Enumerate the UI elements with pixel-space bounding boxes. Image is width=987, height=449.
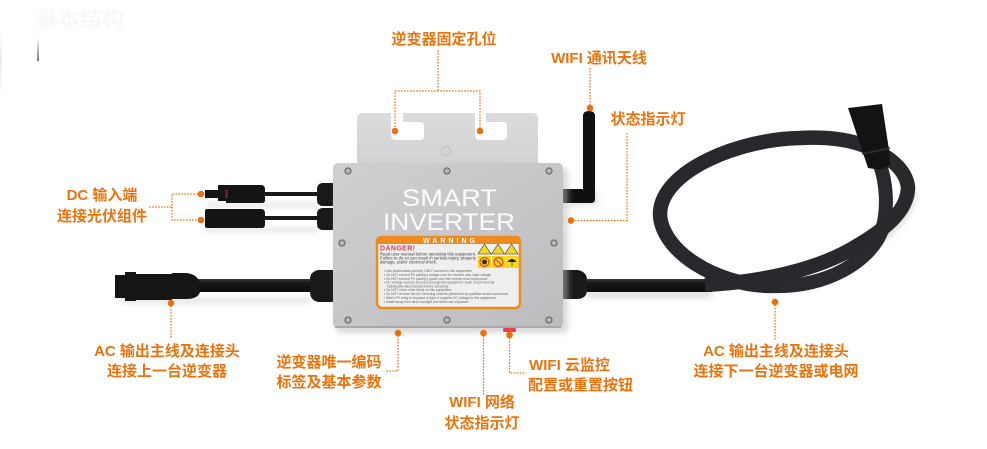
inverter mounting plate <box>357 113 538 164</box>
faint section title: 基本结构 <box>36 7 124 32</box>
cable end connector <box>848 104 890 170</box>
warning label: WARNING <box>423 238 476 245</box>
warning bullet list: • When PV array is exposed to light, it supplies DC voltage to this equipment. <box>384 296 496 300</box>
callout: serial code label: 逆变器唯一编码 <box>276 353 382 371</box>
body screws <box>339 168 557 323</box>
warning label: DANGER! <box>380 246 415 252</box>
warning bullet list: • Do NOT cover other items on this equipment. <box>384 288 452 292</box>
callout: DC input: 连接光伏组件 <box>57 207 147 225</box>
coiled AC cable with connector <box>587 104 912 298</box>
warning bullet list: • Do NOT exceed PV panel(s) power over the inverter max input power. <box>384 277 488 281</box>
callout: wifi network light: WIFI 网络 <box>449 393 515 411</box>
warning label: Failure to do so can result in serious injury, property <box>380 256 477 260</box>
warning bullet list: • Install away from direct sunlight and direct rain exposure. <box>384 300 469 304</box>
product name: INVERTER <box>383 209 515 236</box>
callout: DC input <box>57 186 204 225</box>
warning bullet list: individually disconnected before servicing. <box>387 284 449 288</box>
callout: AC output right: 连接下一台逆变器或电网 <box>693 362 859 380</box>
callout: AC output right: AC 输出主线及连接头 <box>703 342 849 360</box>
warning label: damage, and/or electrical shock. <box>380 260 437 264</box>
callout: wifi network light <box>444 330 520 432</box>
callout: status light: 状态指示灯 <box>610 110 686 128</box>
callout: AC output left: AC 输出主线及连接头 <box>94 342 240 360</box>
callout: mounting holes <box>391 30 497 134</box>
warning bullet list: • Use photovoltaic panel(s) ONLY connect to this equipment. <box>384 269 472 273</box>
warning bullet list: • DC voltage sources are pass through this equipment. Each circuit must be <box>384 281 495 285</box>
warning bullet list: • Do NOT exceed PV panel(s) voltage over the inverter max input voltage. <box>384 273 492 277</box>
product name <box>383 185 515 236</box>
callout: wifi cloud button: 配置或重置按钮 <box>528 376 633 394</box>
callout: serial code label <box>276 330 401 391</box>
product name: SMART <box>402 185 497 212</box>
callout: AC output left: 连接上一台逆变器 <box>107 362 227 380</box>
warning bullet list <box>384 269 509 304</box>
callout: DC input: DC 输入端 <box>67 186 137 204</box>
callout: AC output right <box>693 299 859 380</box>
callout: wifi antenna <box>551 49 647 111</box>
callout: wifi cloud button: WIFI 云监控 <box>529 356 610 374</box>
callout: serial code label: 标签及基本参数 <box>276 373 382 391</box>
callout: status light <box>568 110 686 224</box>
DC input cables and connectors <box>205 185 320 232</box>
red reset button <box>503 328 516 332</box>
callout: wifi cloud button <box>506 332 633 394</box>
callout: wifi network light: 状态指示灯 <box>444 414 520 432</box>
faint section title <box>0 7 124 90</box>
inverter body <box>333 163 568 333</box>
callout: AC output left <box>94 300 240 380</box>
callout: wifi antenna: WIFI 通讯天线 <box>551 49 647 67</box>
hazard icons <box>478 244 518 268</box>
warning bullet list: • Do NOT remove the lid. Servicing must be performed by qualified service personnel. <box>384 292 509 296</box>
warning label <box>376 236 521 308</box>
antenna <box>563 111 598 206</box>
warning label: Read user manual before operating this equipment. <box>380 252 476 256</box>
AC left cable and connector <box>115 272 313 303</box>
callout: mounting holes: 逆变器固定孔位 <box>391 30 497 48</box>
side cable glands <box>310 183 587 302</box>
